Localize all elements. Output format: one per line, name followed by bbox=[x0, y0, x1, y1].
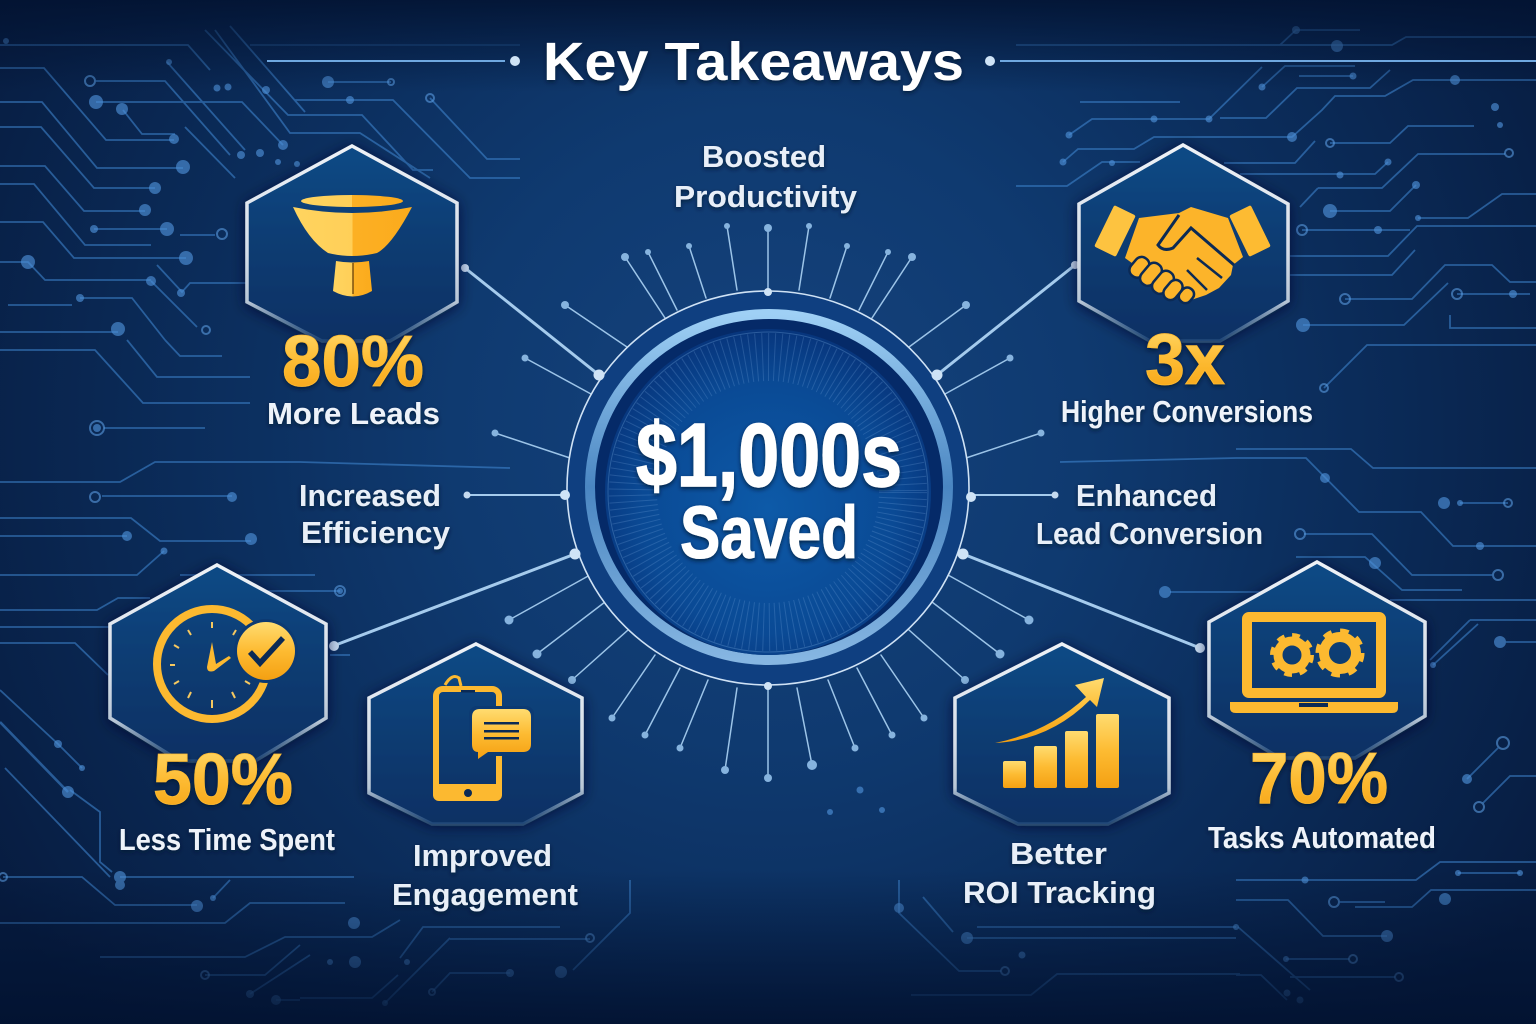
hexagon bbox=[247, 146, 457, 341]
icon: laptop with gears bbox=[1230, 617, 1398, 713]
title: Key Takeaways bbox=[543, 32, 964, 92]
label: higher conversions: Higher Conversions bbox=[1061, 394, 1313, 429]
label: enhanced lead conversion: Enhanced bbox=[1076, 478, 1217, 513]
radial spokes with end dots bbox=[492, 223, 1044, 782]
stat: 3x: 3x bbox=[1145, 320, 1225, 400]
central badge bbox=[560, 288, 976, 690]
icon: phone with chat bubble bbox=[433, 677, 534, 801]
label: more leads: More Leads bbox=[267, 396, 440, 431]
label: increased efficiency bbox=[299, 478, 451, 550]
inner disc bbox=[605, 329, 931, 655]
hexagon bbox=[1209, 562, 1425, 758]
circuit board pattern: bottom left bbox=[0, 340, 630, 1003]
hexagon bbox=[110, 565, 326, 761]
label: enhanced lead conversion bbox=[1036, 478, 1263, 551]
hexagon bbox=[955, 644, 1169, 824]
panel: laptop 70% tasks automated bbox=[1208, 562, 1436, 855]
outer thin ring bbox=[567, 291, 969, 685]
panel: phone improved engagement bbox=[369, 644, 582, 912]
label: better roi tracking: Better bbox=[1010, 836, 1107, 871]
icon: clock with check bbox=[157, 609, 298, 719]
ring nodes bbox=[560, 288, 976, 690]
label: increased efficiency: Increased bbox=[299, 478, 441, 513]
stat: 50%: 50% bbox=[153, 740, 293, 820]
icon: handshake bbox=[1094, 205, 1271, 306]
stat: 80%: 80% bbox=[282, 322, 424, 402]
circuit board pattern: bottom right bbox=[899, 345, 1536, 1000]
disc tick outline bbox=[608, 332, 928, 652]
stat: 70%: 70% bbox=[1250, 739, 1388, 819]
icon: bar chart with arrow bbox=[995, 678, 1119, 788]
label: tasks automated: Tasks Automated bbox=[1208, 820, 1436, 855]
label: better roi tracking bbox=[963, 836, 1156, 910]
label: improved engagement: Improved bbox=[413, 838, 552, 873]
label: less time spent: Less Time Spent bbox=[119, 822, 335, 857]
title bbox=[267, 32, 1536, 92]
panel: clock 50% less time spent bbox=[110, 565, 335, 857]
label: improved engagement: Engagement bbox=[392, 877, 578, 912]
panel: handshake 3x higher conversions bbox=[1061, 145, 1313, 429]
label: improved engagement bbox=[392, 838, 578, 912]
panel: funnel 80% more leads bbox=[247, 146, 457, 431]
hexagon bbox=[1079, 145, 1288, 341]
label: better roi tracking: ROI Tracking bbox=[963, 875, 1156, 910]
disc radial ticks bbox=[633, 357, 903, 627]
panel: chart better roi tracking bbox=[955, 644, 1169, 910]
blue bevel ring bbox=[590, 314, 948, 660]
headline caption: Saved bbox=[680, 491, 858, 574]
circuit board pattern: top right bbox=[1016, 30, 1536, 328]
label: boosted productivity: Productivity bbox=[674, 179, 858, 214]
label: increased efficiency: Efficiency bbox=[301, 515, 451, 550]
circuit board pattern: top left bbox=[0, 26, 520, 340]
label: enhanced lead conversion: Lead Conversion bbox=[1036, 516, 1263, 551]
label: boosted productivity: Boosted bbox=[702, 139, 826, 174]
icon: funnel bbox=[293, 195, 412, 296]
label: boosted productivity bbox=[674, 139, 858, 214]
hexagon bbox=[369, 644, 582, 824]
connector lines bbox=[329, 261, 1205, 653]
headline value: $1,000s bbox=[636, 406, 902, 506]
